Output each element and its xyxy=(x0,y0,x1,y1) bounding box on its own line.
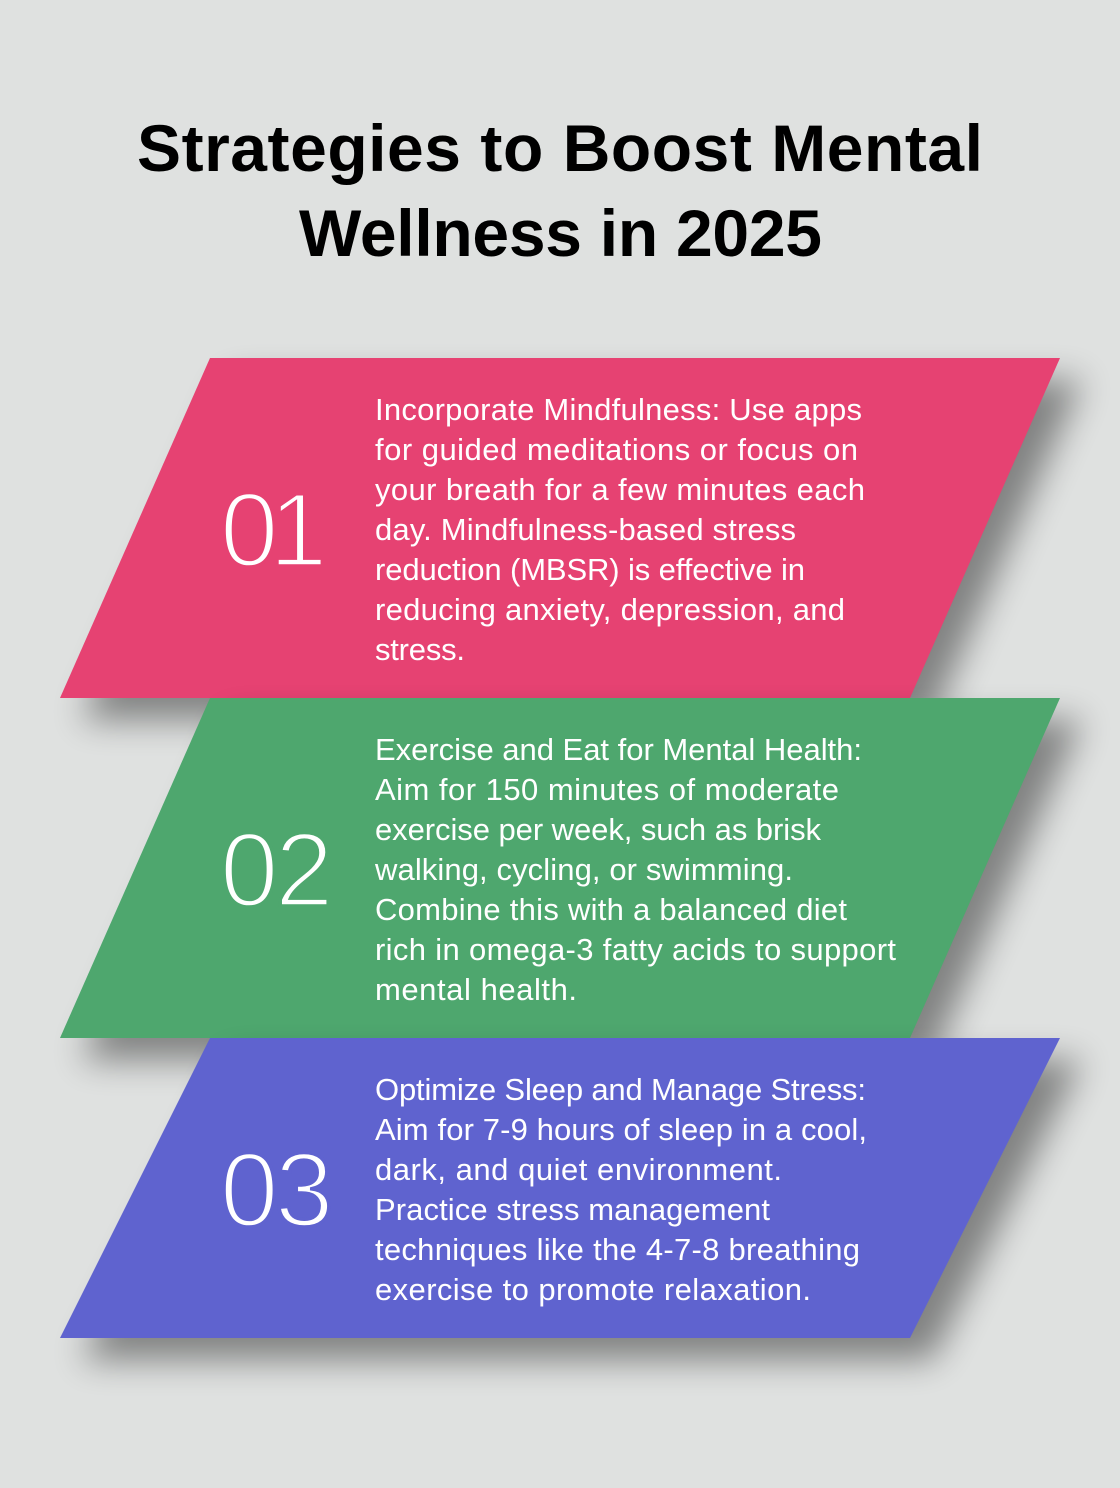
text: sleep and stress: exercise to promote relaxation. xyxy=(375,1272,811,1307)
text: exercise and diet: Aim for 150 minutes of moderate xyxy=(375,772,839,807)
text: mindfulness: for guided meditations or focus on xyxy=(375,432,858,467)
panel: step 02 xyxy=(60,698,1060,1038)
text: sleep and stress: Practice stress management xyxy=(375,1192,770,1227)
panel 01 background xyxy=(60,358,1060,698)
text: mindfulness: reducing anxiety, depression, and xyxy=(375,592,845,627)
text: mindfulness: Incorporate Mindfulness: Use apps xyxy=(375,392,862,427)
title: Strategies to Boost Mental xyxy=(137,111,983,185)
text: exercise and diet: Exercise and Eat for Mental Health: xyxy=(375,732,862,767)
panel: step 01 xyxy=(60,358,1060,698)
panel: step 03 xyxy=(60,1038,1060,1338)
text: mindfulness: day. Mindfulness-based stress xyxy=(375,512,796,547)
number 02: 02 xyxy=(220,812,333,929)
panel 03 background xyxy=(60,1038,1060,1338)
panel 02 background xyxy=(60,698,1060,1038)
title xyxy=(137,111,983,270)
title: Wellness in 2025 xyxy=(299,196,822,270)
text: mindfulness: stress. xyxy=(375,632,465,667)
text: mindfulness: reduction (MBSR) is effective in xyxy=(375,552,805,587)
number 01: 01 xyxy=(220,472,327,589)
text: sleep and stress: Optimize Sleep and Manage Stress: xyxy=(375,1072,866,1107)
text: sleep and stress: techniques like the 4-7-8 breathing xyxy=(375,1232,860,1267)
text: mindfulness: your breath for a few minutes each xyxy=(375,472,865,507)
text: exercise and diet: mental health. xyxy=(375,972,577,1007)
text: exercise and diet: exercise per week, such as brisk xyxy=(375,812,822,847)
text: sleep and stress: dark, and quiet environment. xyxy=(375,1152,782,1187)
text: sleep and stress xyxy=(375,1072,867,1307)
text: exercise and diet: rich in omega-3 fatty acids to support xyxy=(375,932,896,967)
text: exercise and diet: Combine this with a balanced diet xyxy=(375,892,847,927)
text: sleep and stress: Aim for 7-9 hours of sleep in a cool, xyxy=(375,1112,867,1147)
text: exercise and diet: walking, cycling, or swimming. xyxy=(374,852,793,887)
number 03: 03 xyxy=(220,1132,333,1249)
text: exercise and diet xyxy=(374,732,896,1007)
text: mindfulness xyxy=(375,392,865,667)
